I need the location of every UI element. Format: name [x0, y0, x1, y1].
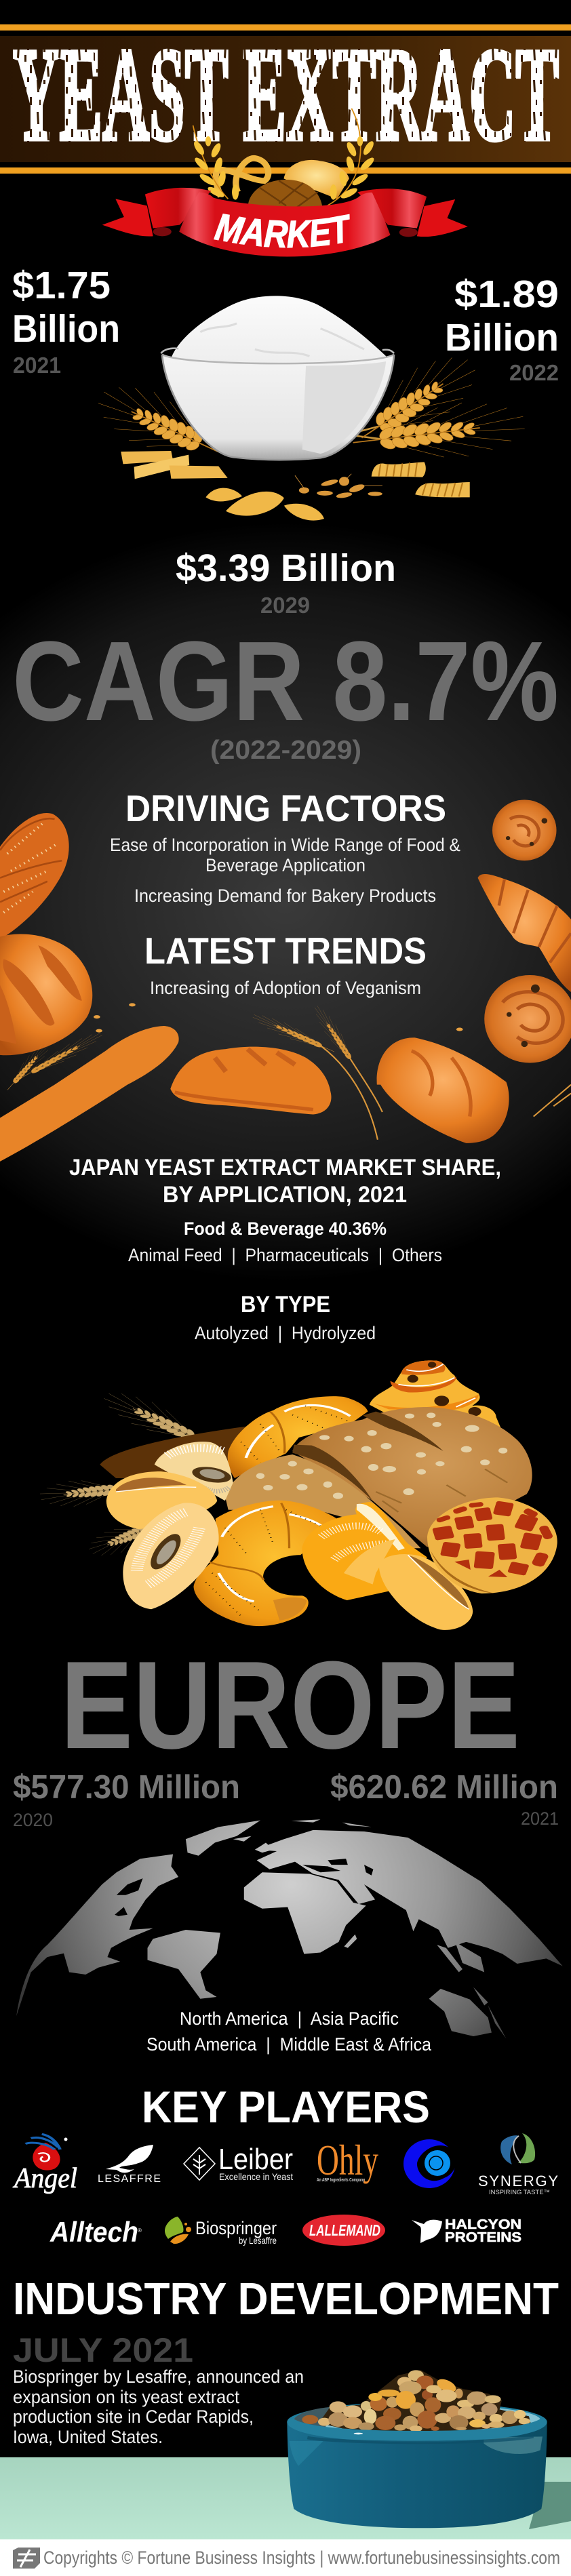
right wheat fragment	[534, 1085, 571, 1117]
logo: Leiber	[184, 2143, 293, 2182]
background glow panel	[0, 522, 571, 1288]
header band	[0, 24, 571, 174]
icon: top right bun	[492, 799, 557, 860]
chart: world globe map	[16, 1819, 563, 2039]
logo: Angel	[12, 2134, 77, 2194]
illustration: bakery items around text	[0, 799, 571, 1162]
logo: Alltech: Alltech	[50, 2216, 138, 2248]
by type text: BY TYPE	[241, 1292, 330, 1317]
footer bar	[0, 2539, 571, 2576]
stat: Europe 2021	[330, 1769, 559, 1829]
stat: 2029 value: 2029	[260, 593, 310, 618]
icon: crumbs	[94, 1003, 463, 1033]
stat: 2029 value: $3.39 Billion	[176, 547, 396, 590]
driving factors text: Ease of Incorporation in Wide Range of Food &	[110, 835, 460, 855]
logo: Halcyon Proteins: HALCYON	[445, 2217, 521, 2232]
icon: front half roll	[379, 1554, 473, 1630]
ribbon label: MARKET	[214, 214, 350, 248]
ribbon left tail	[102, 199, 153, 236]
heading: Japan market share: BY APPLICATION, 2021	[163, 1182, 407, 1208]
icon: dark shadow	[100, 1426, 248, 1478]
by type text	[195, 1292, 376, 1343]
ribbon centre	[179, 192, 391, 257]
icon: top bun	[370, 1360, 501, 1429]
bowl body	[287, 2422, 547, 2528]
logos panel	[12, 2133, 558, 2248]
Greenland	[186, 1821, 260, 1856]
Madagascar	[344, 1935, 357, 1948]
stat: Europe 2021: $620.62 Million	[330, 1769, 558, 1806]
stat: CAGR: (2022-2029)	[210, 736, 361, 765]
icon: front donut	[123, 1503, 219, 1609]
icon: bottom croissant	[193, 1501, 340, 1626]
icon: right loaf	[377, 1037, 509, 1143]
development date: JULY 2021	[13, 2331, 193, 2369]
logo: Synergy: INSPIRING TASTE™	[489, 2189, 550, 2196]
icon: right bun	[484, 975, 571, 1063]
logo: Synergy: SYNERGY	[478, 2173, 558, 2189]
stat: 2021 value	[12, 264, 120, 378]
application segments: Animal Feed | Pharmaceuticals | Others	[128, 1245, 442, 1265]
logo: Ohly: An ABF Ingredients Company	[317, 2178, 365, 2183]
development text: Iowa, United States.	[13, 2427, 163, 2447]
other regions text	[146, 2008, 432, 2055]
driving factors text: Beverage Application	[205, 855, 366, 875]
stat: Europe 2020: 2020	[13, 1810, 53, 1830]
icon: roll	[283, 160, 349, 199]
North America	[16, 1854, 178, 2016]
icon: wheat bunch	[38, 1385, 219, 1562]
stat: 2021 value: $1.75	[12, 264, 111, 307]
stat: Europe 2020	[13, 1769, 240, 1830]
South America	[147, 1930, 220, 1999]
stat: 2022 value	[445, 273, 559, 385]
icon: wheat stems	[3, 1004, 362, 1094]
bowl shadow	[529, 2482, 571, 2529]
logo: Lallemand	[302, 2215, 385, 2246]
logo: Alltech: ®	[138, 2227, 142, 2234]
illustration: bread pile	[38, 1360, 557, 1630]
heading: key players: KEY PLAYERS	[142, 2082, 430, 2132]
icon: lattice tart	[427, 1497, 557, 1593]
bowl rim	[287, 2402, 547, 2442]
icon: roll	[106, 1471, 217, 1529]
logo: Leiber: Leiber	[218, 2143, 293, 2176]
logo: Synergy	[478, 2133, 558, 2196]
UK	[255, 1843, 273, 1852]
logo: Halcyon Proteins: PROTEINS	[445, 2230, 521, 2245]
icon: penne pasta	[121, 451, 228, 479]
logo: Biospringer	[165, 2217, 277, 2246]
icon: shell pasta	[205, 488, 324, 521]
icon: fusilli pasta	[372, 462, 470, 497]
latest trends text: Increasing of Adoption of Veganism	[150, 978, 421, 998]
icon: grains	[295, 474, 382, 499]
stat: 2022 value: Billion	[445, 316, 559, 359]
heading: Japan market share: JAPAN YEAST EXTRACT MARKET SHARE,	[69, 1155, 501, 1181]
logo: Lesaffre: LESAFFRE	[98, 2173, 161, 2185]
icon: croissant	[478, 874, 571, 992]
development text: expansion on its yeast extract	[13, 2387, 239, 2407]
heading: Japan market share	[69, 1155, 501, 1208]
icon: round loaf	[0, 934, 92, 1055]
illustration: flour bowl and wheat	[89, 296, 528, 521]
driving factors text	[110, 787, 460, 906]
logo: Biospringer: Biospringer	[195, 2218, 277, 2238]
bakery crest with ribbon	[102, 108, 468, 257]
icon: wheat right	[345, 343, 528, 469]
kibble	[319, 2370, 531, 2432]
logo: blue circle	[403, 2139, 456, 2188]
logo: Angel: Angel	[12, 2163, 77, 2194]
stat: 2021 value: Billion	[12, 307, 120, 351]
stat: 2021 value: 2021	[13, 353, 61, 378]
development text: production site in Cedar Rapids,	[13, 2406, 254, 2427]
logo: Biospringer: by Lesaffre	[239, 2235, 277, 2246]
latest trends text: LATEST TRENDS	[144, 930, 427, 972]
logo: Leiber: Excellence in Yeast	[219, 2171, 293, 2182]
driving factors text: DRIVING FACTORS	[125, 787, 446, 829]
icon: wheat left	[89, 374, 231, 476]
application segments: Food & Beverage 40.36%	[184, 1218, 387, 1239]
Australia	[429, 1989, 492, 2036]
logo: Lesaffre	[98, 2145, 161, 2185]
icon: bowl of kibble	[287, 2370, 547, 2528]
application segments	[128, 1218, 442, 1265]
icon: cut rolls	[302, 1502, 427, 1600]
icon: bottom baguette	[0, 1026, 179, 1162]
icon: pretzel	[216, 158, 269, 197]
SE Asia islands	[437, 1942, 506, 2039]
development text	[13, 2366, 304, 2447]
icon: dark loaf	[248, 180, 323, 208]
stat: Europe 2020: $577.30 Million	[13, 1769, 240, 1806]
table surface	[0, 2457, 571, 2539]
stat: 2029 value	[176, 547, 396, 618]
other regions text: North America | Asia Pacific	[180, 2008, 399, 2029]
logo: Ohly: Ohly	[317, 2136, 378, 2184]
stat: 2022 value: 2022	[509, 360, 559, 385]
front rim	[287, 2419, 547, 2442]
lakes and seas	[115, 1859, 373, 1916]
footer logo	[13, 2548, 40, 2569]
wheat stem lower	[321, 1046, 382, 1140]
Arctic islands	[292, 1819, 372, 1827]
stat: Europe 2021: 2021	[521, 1808, 559, 1829]
icon: centre loaf	[170, 1047, 331, 1115]
driving factors text: Increasing Demand for Bakery Products	[134, 886, 436, 906]
development text: Biospringer by Lesaffre, announced an	[13, 2366, 304, 2387]
latest trends text	[144, 930, 427, 998]
icon: seeded baguette	[0, 813, 69, 939]
icon: top donut	[155, 1442, 233, 1501]
stat: 2022 value: $1.89	[454, 273, 559, 316]
ribbon right tail	[417, 199, 468, 237]
logo: Lallemand: LALLEMAND	[309, 2221, 380, 2239]
logo: Halcyon Proteins	[412, 2217, 521, 2245]
icon: right wheat crest	[328, 108, 376, 205]
other regions text: South America | Middle East & Africa	[146, 2034, 432, 2055]
Eurasia	[255, 1830, 563, 1966]
icon: big loaf	[225, 1407, 532, 1548]
icon: glass bowl	[161, 296, 394, 460]
Africa	[244, 1872, 366, 1954]
icon: top croissant	[228, 1396, 368, 1478]
icon: left wheat crest	[192, 125, 239, 200]
by type text: Autolyzed | Hydrolyzed	[195, 1323, 376, 1343]
